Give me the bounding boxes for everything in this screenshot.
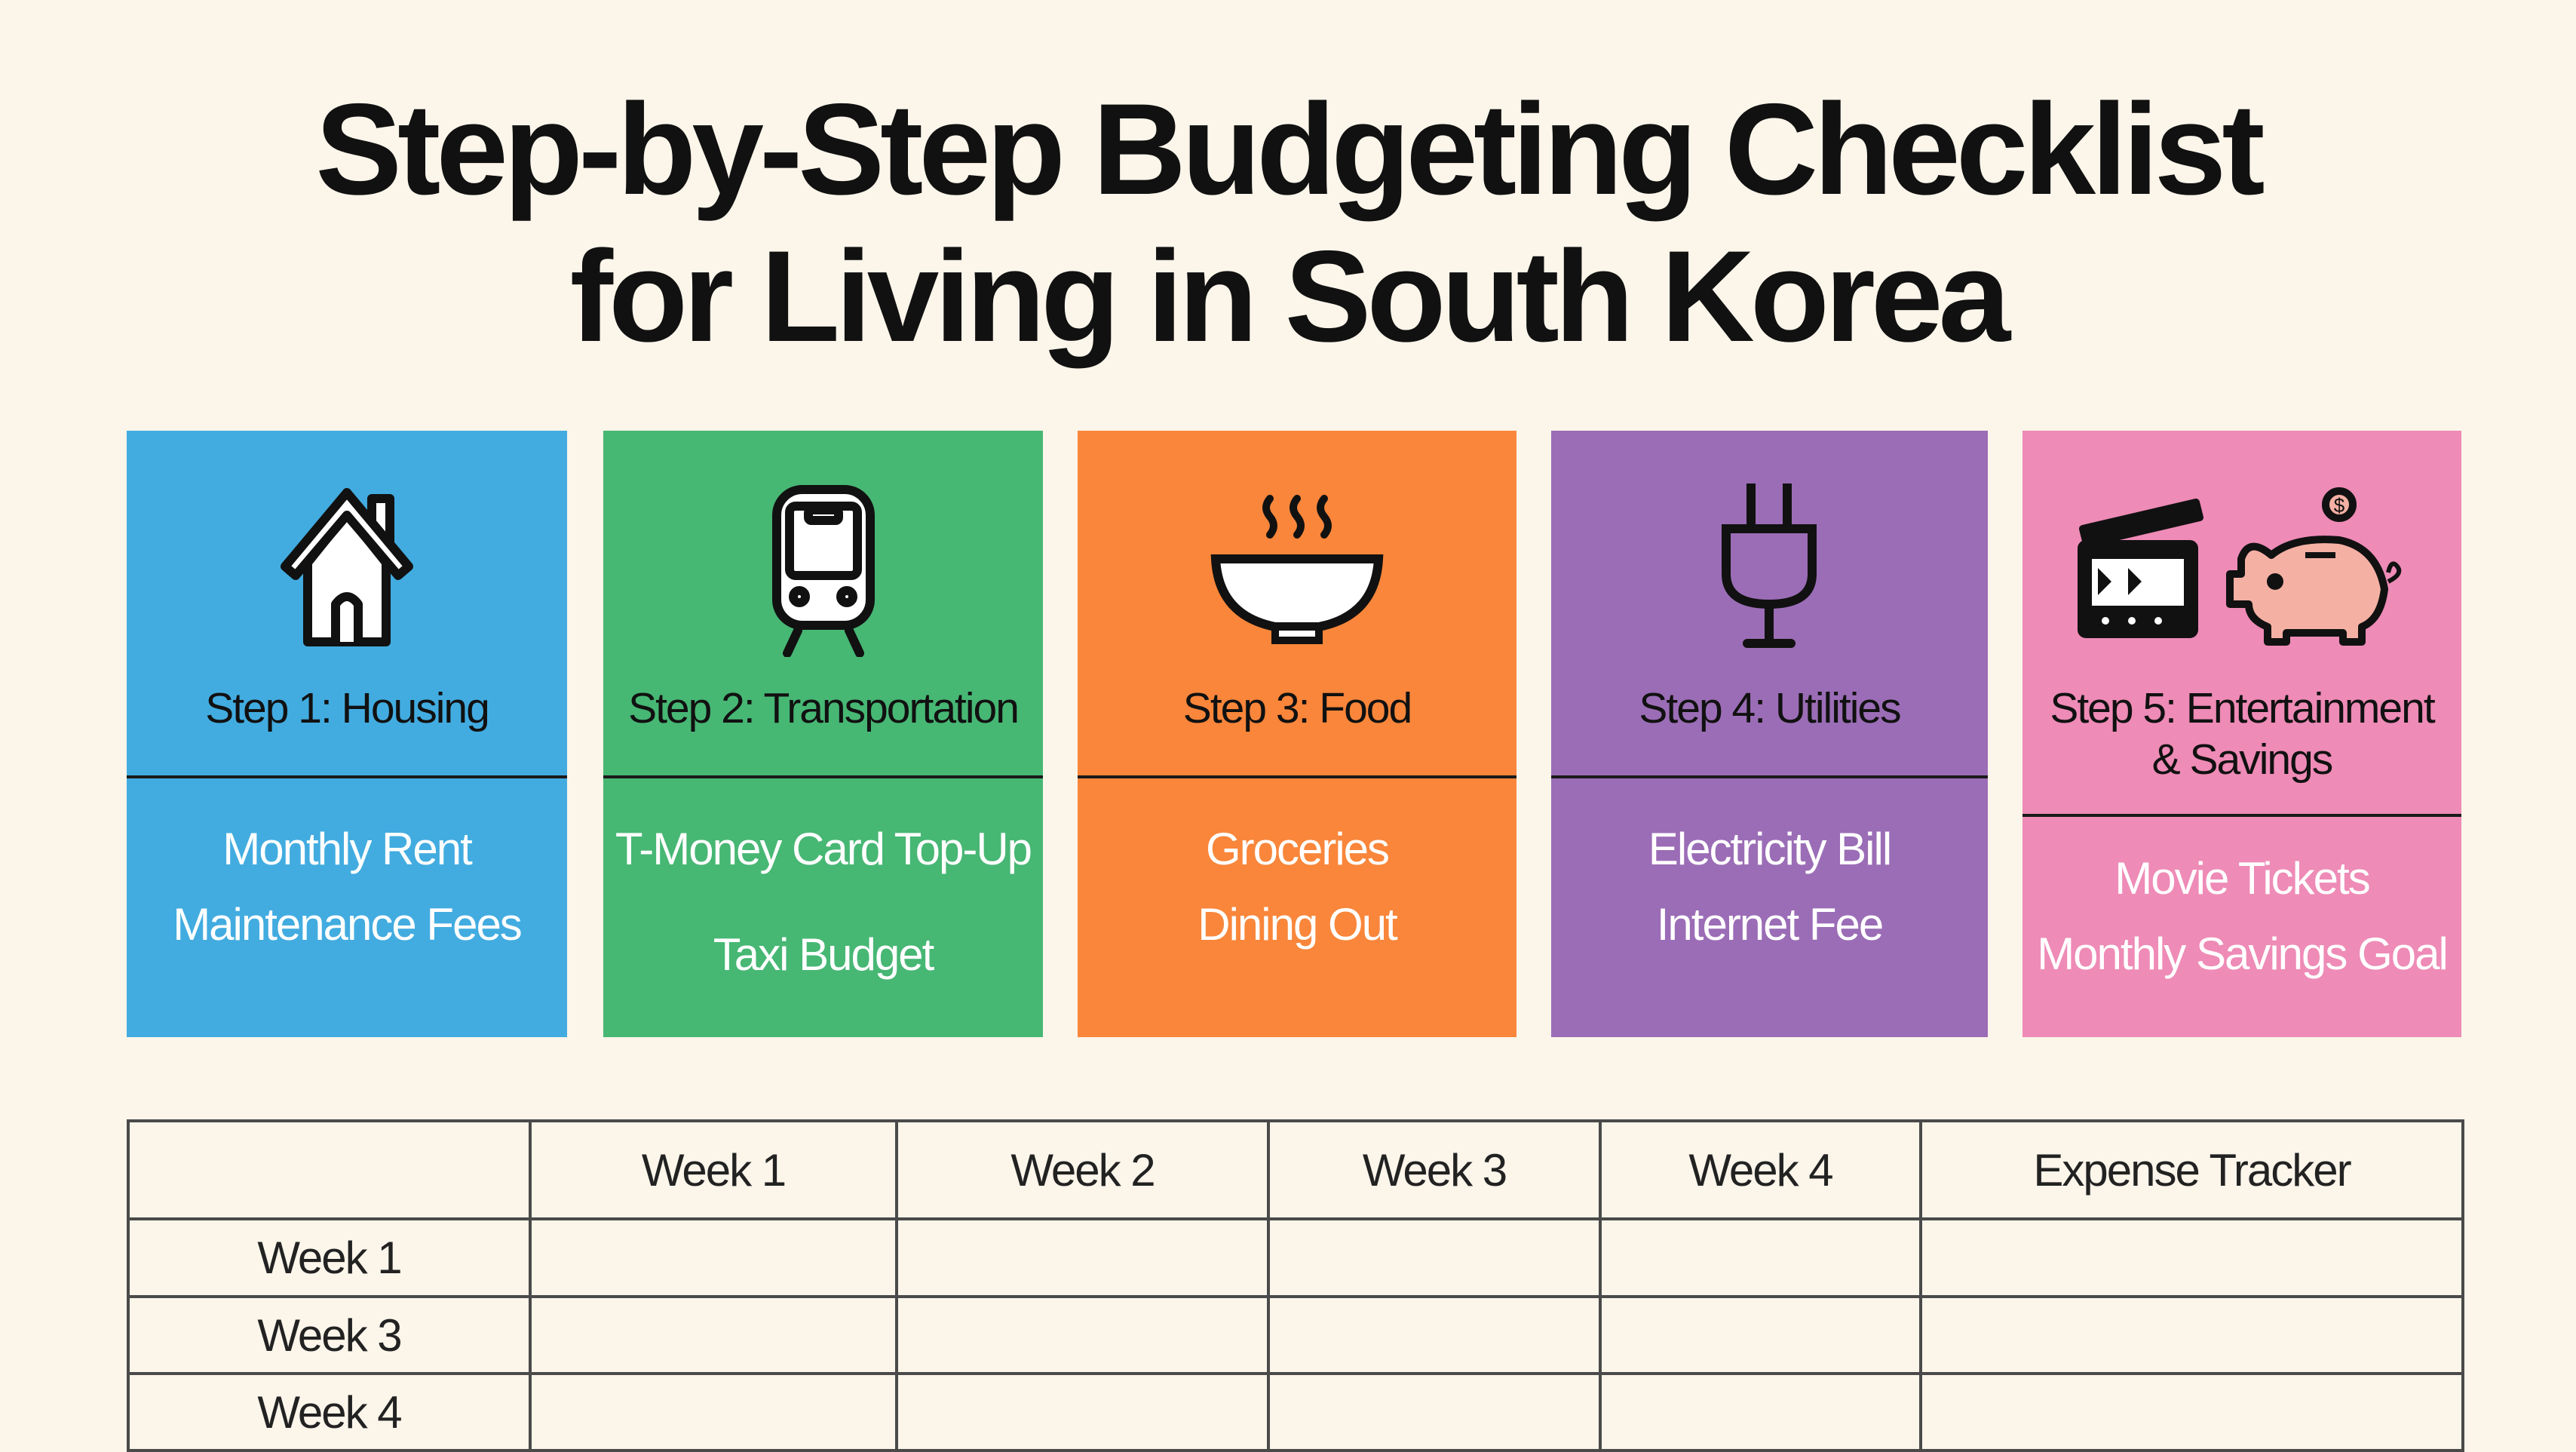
step label: Step 3: Food — [1183, 684, 1411, 732]
expense tracker table: Expense Tracker — [2033, 1145, 2351, 1195]
step label: Step 1: Housing — [205, 684, 489, 732]
title: for Living in South Korea — [570, 224, 2006, 369]
expense tracker table: Week 2 — [1010, 1145, 1155, 1195]
expense tracker table: Week 3 — [1363, 1145, 1506, 1195]
icon: train — [772, 485, 875, 657]
items — [1198, 824, 1398, 950]
items: T-Money Card Top-Up — [615, 824, 1031, 874]
items — [615, 824, 1031, 980]
panel: utilities — [1551, 431, 1988, 1037]
step label: Step 2: Transportation — [628, 684, 1018, 732]
panel: housing — [127, 431, 567, 1037]
panel: entertainment — [2022, 431, 2461, 1037]
icon: plug — [1722, 483, 1817, 648]
icon: bowl — [1211, 495, 1383, 644]
icon: clapper and piggy bank: $ — [2334, 494, 2345, 517]
items: Maintenance Fees — [173, 899, 521, 950]
expense tracker table: Week 4 — [257, 1386, 401, 1438]
step label: & Savings — [2152, 735, 2332, 784]
items — [173, 824, 521, 950]
expense tracker table — [127, 1119, 2464, 1452]
items: Groceries — [1206, 824, 1388, 874]
items: Monthly Rent — [222, 824, 471, 874]
expense tracker table: Week 1 — [257, 1233, 401, 1283]
title: Step-by-Step Budgeting Checklist — [315, 77, 2261, 222]
expense tracker table: Week 1 — [642, 1145, 785, 1195]
expense tracker table: Week 4 — [1688, 1145, 1832, 1195]
items: Taxi Budget — [713, 929, 933, 980]
icon: clapper and piggy bank — [2078, 487, 2401, 646]
step label — [2050, 684, 2436, 784]
icon: house — [281, 488, 413, 646]
panel: food — [1078, 431, 1516, 1037]
expense tracker table: Week 3 — [257, 1309, 401, 1361]
items: Monthly Savings Goal — [2037, 929, 2447, 979]
items — [1648, 824, 1891, 950]
title — [315, 77, 2264, 369]
items: Internet Fee — [1657, 899, 1882, 950]
panel: transportation — [603, 431, 1043, 1037]
step label: Step 5: Entertainment — [2050, 684, 2434, 732]
step label: Step 4: Utilities — [1639, 684, 1900, 732]
items: Dining Out — [1198, 899, 1397, 950]
items: Movie Tickets — [2114, 853, 2369, 904]
items — [2037, 853, 2447, 979]
items: Electricity Bill — [1648, 824, 1891, 874]
